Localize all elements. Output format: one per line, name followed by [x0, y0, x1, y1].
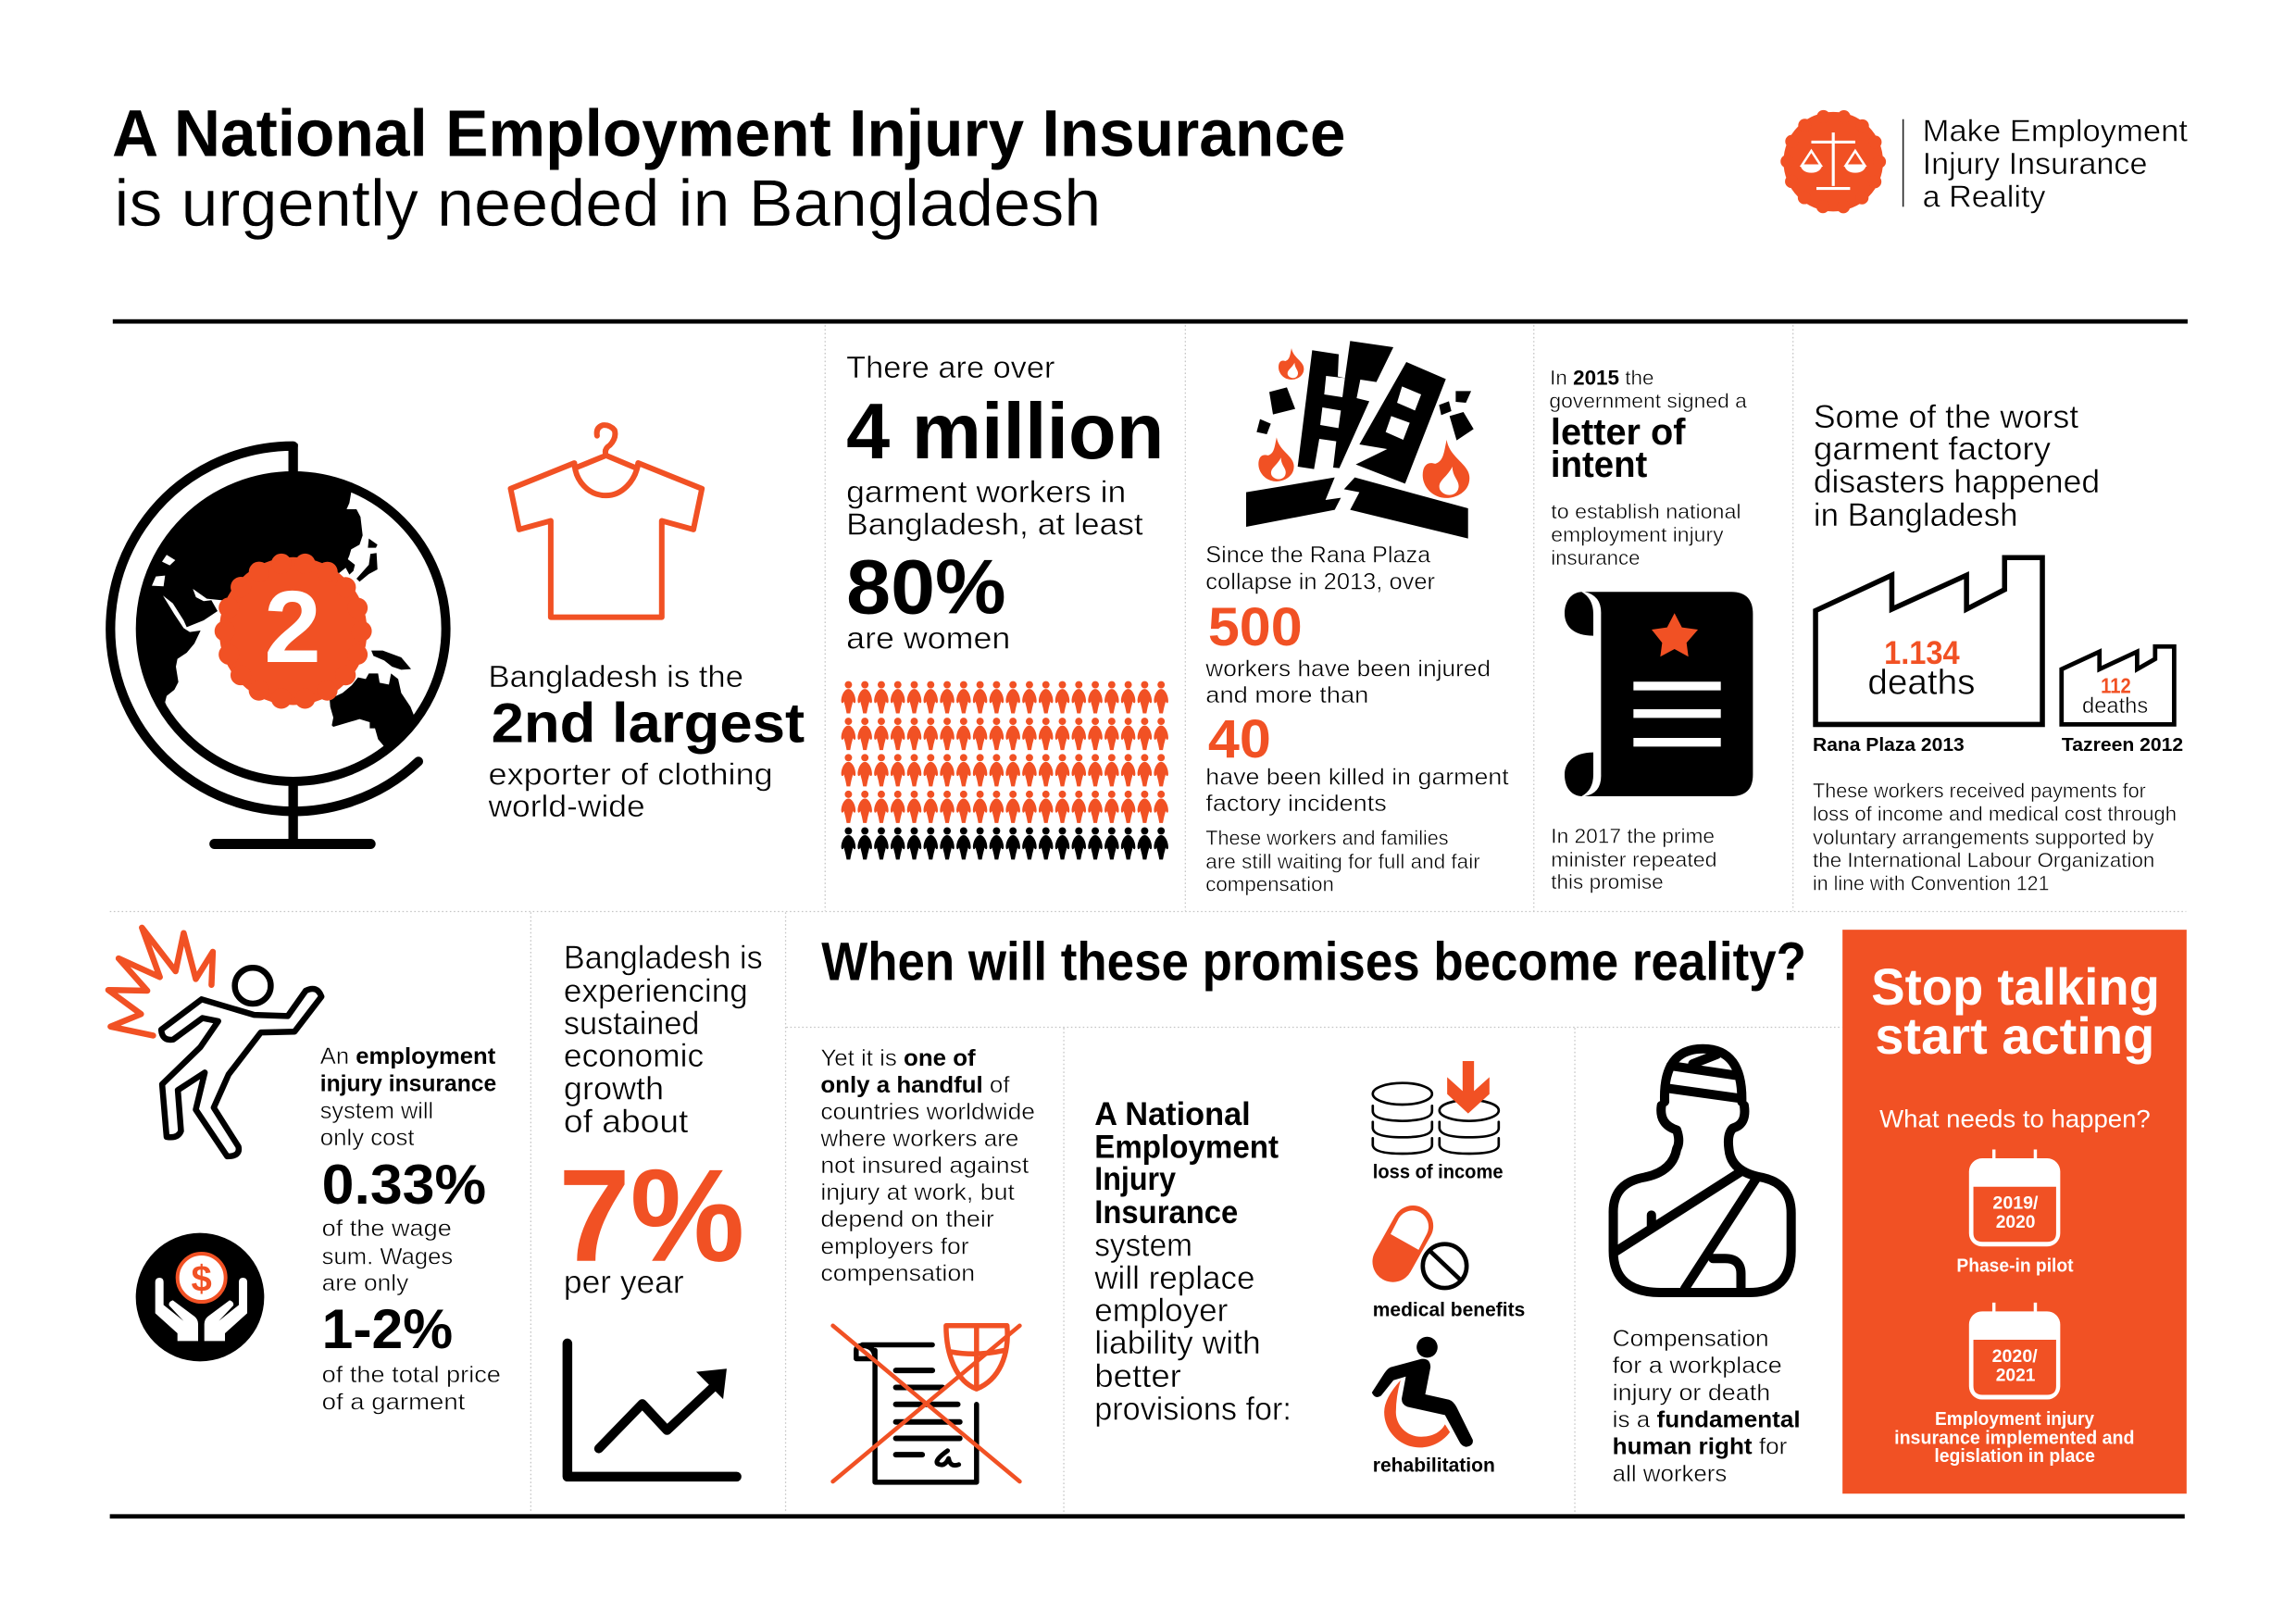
milestone: 2020/2021 implementation: 2020/	[1992, 1346, 2038, 1367]
text: system provisions: provisions for:	[1094, 1393, 1292, 1428]
milestone: 2020/2021 implementation: 2021	[1996, 1365, 2035, 1385]
text: letter of intent: to establish national	[1551, 500, 1741, 523]
text: insurance cost figures: of the total price	[322, 1363, 501, 1388]
text: insurance cost figures: of the wage	[322, 1217, 452, 1242]
icon: hands holding coin: $	[192, 1259, 212, 1300]
panel: fundamental human right	[1613, 1049, 1801, 1487]
milestone: 2019/2020 phase-in pilot	[1956, 1150, 2074, 1277]
text: system provisions: employer	[1094, 1293, 1228, 1329]
text: insurance cost figures: 1-2%	[322, 1298, 453, 1360]
text: insurance cost figures: sum. Wages	[322, 1245, 453, 1270]
text: disasters heading: Some of the worst	[1814, 400, 2078, 435]
text: worker statistics	[846, 351, 1164, 656]
text: growth statement: of about	[564, 1105, 689, 1140]
panel: 2nd largest exporter	[110, 425, 805, 843]
heading: call to action: Stop talking	[1871, 958, 2160, 1016]
milestone: 2020/2021 implementation: Employment injury	[1935, 1408, 2095, 1430]
text: what needs to happen: What needs to happen?	[1879, 1106, 2151, 1133]
text: voluntary payments: These workers received payments for	[1813, 780, 2146, 803]
text: injury and death figures: are still waiting for full and fair	[1205, 850, 1480, 873]
title: A National Employment Injury Insurance	[112, 97, 1346, 170]
logo text: Make Employment	[1923, 115, 2188, 149]
logo text	[1923, 115, 2188, 214]
text: human right statement: human right for	[1613, 1434, 1787, 1460]
icon: hands holding coin	[136, 1233, 264, 1361]
title	[112, 97, 1346, 241]
text: injury and death figures: and more than	[1205, 682, 1368, 708]
logo text: Injury Insurance	[1923, 147, 2147, 181]
text: growth statement	[558, 941, 763, 1301]
text: insurance cost figures: of a garment	[322, 1390, 466, 1415]
text: uninsured countries: Yet it is one of	[820, 1045, 976, 1071]
title: is urgently needed in Bangladesh	[114, 168, 1101, 241]
text: growth statement: Bangladesh is	[564, 941, 763, 976]
text: insurance cost figures	[320, 1044, 501, 1415]
text: growth statement: economic	[564, 1039, 704, 1074]
text: exporter statement: world-wide	[487, 790, 645, 824]
text: system provisions: liability with	[1094, 1326, 1261, 1361]
text: worker statistics: 4 million	[846, 388, 1164, 476]
text: voluntary payments: the International Labour Organization	[1813, 848, 2154, 871]
panel: handful of countries	[819, 1045, 1035, 1482]
text: uninsured countries	[819, 1045, 1035, 1286]
icon: injured man with bandage and sling	[1614, 1049, 1791, 1293]
icon: globe with rank badge: 2	[264, 570, 321, 684]
text: exporter statement: exporter of clothing	[488, 758, 773, 793]
factory: Rana Plaza	[1813, 557, 2042, 756]
text: uninsured countries: where workers are	[819, 1126, 1018, 1152]
text: voluntary payments: loss of income and medical cost through	[1813, 803, 2177, 826]
text: injury and death figures: 40	[1208, 709, 1271, 769]
text: growth statement: growth	[564, 1071, 664, 1106]
icon: globe with rank badge	[110, 443, 446, 843]
text: uninsured countries: depend on their	[820, 1206, 994, 1232]
text: letter of intent: In 2015 the	[1550, 366, 1653, 389]
text: system provisions: Insurance	[1094, 1195, 1238, 1230]
milestone: 2019/2020 phase-in pilot: Phase-in pilot	[1956, 1255, 2074, 1277]
icon: scales of justice badge	[1783, 112, 1883, 211]
panel: economic growth	[558, 941, 763, 1477]
text: human right statement: injury or death	[1613, 1380, 1770, 1405]
text: worker statistics: are women	[846, 622, 1010, 656]
text: system provisions: better	[1094, 1359, 1181, 1394]
icon: wheelchair rehabilitation	[1372, 1337, 1495, 1477]
text: insurance cost figures: An employment	[320, 1044, 495, 1069]
text: system provisions: A National	[1094, 1097, 1251, 1132]
icon: t-shirt on hanger	[511, 425, 702, 618]
text: worker statistics: There are over	[846, 351, 1054, 385]
factory: Tazreen: deaths	[2082, 694, 2148, 718]
text: insurance cost figures: 0.33%	[322, 1154, 486, 1216]
text: prime minister promise	[1551, 825, 1717, 893]
text: insurance cost figures: system will	[320, 1099, 433, 1124]
text: system provisions	[1093, 1097, 1292, 1428]
text: insurance cost figures: only cost	[320, 1126, 415, 1151]
text: system provisions: Employment	[1094, 1131, 1279, 1166]
factory: Rana Plaza: Rana Plaza 2013	[1813, 734, 1965, 756]
icon: injured worker with burst	[108, 928, 321, 1156]
panel: Rana Plaza collapse	[1204, 341, 1509, 895]
factory: Rana Plaza: deaths	[1867, 663, 1975, 702]
text: human right statement: for a workplace	[1613, 1353, 1782, 1379]
text: injury and death figures: workers have been injured	[1204, 656, 1491, 682]
text: letter of intent: intent	[1551, 444, 1647, 485]
milestone: 2019/2020 phase-in pilot: 2019/	[1992, 1193, 2039, 1214]
text: injury and death figures: 500	[1208, 597, 1303, 657]
text: voluntary payments	[1813, 780, 2177, 894]
text: worker statistics: Bangladesh, at least	[846, 507, 1143, 542]
factory: Tazreen: 112	[2101, 674, 2131, 698]
text: growth statement: per year	[564, 1266, 684, 1301]
text: human right statement: all workers	[1613, 1461, 1727, 1487]
text: injury and death figures: Since the Rana Plaza	[1205, 542, 1431, 568]
icon: collapsing burning building	[1246, 341, 1474, 539]
text: letter of intent: insurance	[1551, 546, 1640, 569]
text: voluntary payments: in line with Convention 121	[1813, 871, 2049, 894]
text: growth statement: experiencing	[564, 974, 748, 1009]
text: prime minister promise: In 2017 the prime	[1551, 825, 1715, 848]
panel: letter of intent	[1549, 366, 1753, 893]
text: disasters heading: garment factory	[1814, 432, 2052, 468]
heading: call to action	[1871, 958, 2160, 1065]
text: injury and death figures: factory incidents	[1205, 791, 1387, 817]
icon: wheelchair rehabilitation: rehabilitation	[1373, 1455, 1495, 1477]
text: worker statistics: 80%	[846, 543, 1006, 631]
text: uninsured countries: injury at work, but	[820, 1180, 1015, 1206]
text: prime minister promise: this promise	[1551, 870, 1664, 893]
panel: stop talking start acting	[1842, 930, 2187, 1493]
text: uninsured countries: only a handful of	[820, 1072, 1011, 1098]
text: prime minister promise: minister repeated	[1551, 848, 1717, 871]
text: worker statistics: garment workers in	[846, 475, 1126, 509]
logo: campaign badge and name	[1783, 112, 2188, 214]
panel: factory disasters	[1813, 400, 2183, 894]
factory: Tazreen	[2062, 646, 2183, 756]
icon: pill with no sign	[1373, 1210, 1525, 1321]
text: uninsured countries: not insured against	[820, 1153, 1029, 1179]
icon: pill with no sign: medical benefits	[1373, 1299, 1525, 1321]
text: injury and death figures: collapse in 2013, over	[1205, 568, 1435, 594]
factory: Tazreen: Tazreen 2012	[2062, 734, 2183, 756]
panel: better provisions	[1093, 1061, 1525, 1477]
logo text: a Reality	[1923, 180, 2046, 214]
panel: insurance cost	[108, 928, 501, 1415]
text: voluntary payments: voluntary arrangements supported by	[1813, 826, 2155, 849]
text: system provisions: Injury	[1094, 1162, 1177, 1197]
text: letter of intent: government signed a	[1549, 390, 1748, 413]
text: uninsured countries: employers for	[820, 1233, 969, 1259]
text: exporter statement: 2nd largest	[492, 692, 805, 754]
milestone: 2020/2021 implementation	[1894, 1303, 2135, 1467]
text: exporter statement: Bangladesh is the	[488, 660, 743, 694]
milestone: 2019/2020 phase-in pilot: 2020	[1996, 1212, 2035, 1232]
text: human right statement: is a fundamental	[1613, 1407, 1801, 1433]
heading: call to action: start acting	[1875, 1007, 2154, 1065]
text: injury and death figures: have been killed in garment	[1205, 765, 1509, 791]
text: letter of intent: employment injury	[1551, 523, 1725, 546]
milestone: 2020/2021 implementation: legislation in place	[1934, 1445, 2095, 1467]
text: uninsured countries: compensation	[820, 1260, 975, 1286]
text: insurance cost figures: injury insurance	[320, 1071, 496, 1096]
text: system provisions: system	[1094, 1229, 1192, 1264]
factory: Rana Plaza: 1.134	[1884, 636, 1960, 671]
text: growth statement: sustained	[564, 1006, 699, 1042]
text: insurance cost figures: are only	[322, 1271, 409, 1296]
text: exporter statement	[487, 660, 805, 824]
text: disasters heading	[1814, 400, 2100, 533]
text: injury and death figures: These workers and families	[1205, 827, 1449, 850]
icon: coins with down arrow	[1373, 1061, 1504, 1183]
text: injury and death figures	[1204, 542, 1509, 895]
text: injury and death figures: compensation	[1205, 872, 1334, 895]
panel: 4 million workers	[842, 351, 1168, 859]
text: letter of intent: letter of	[1551, 412, 1686, 453]
text: human right statement	[1613, 1326, 1801, 1487]
text: uninsured countries: countries worldwide	[820, 1099, 1035, 1125]
text: system provisions: will replace	[1093, 1261, 1254, 1296]
pictogram: 80% women workers	[842, 681, 1168, 859]
milestone: 2020/2021 implementation: insurance implemented and	[1894, 1427, 2135, 1448]
icon: rising line chart	[568, 1343, 737, 1477]
text: disasters heading: disasters happened	[1814, 465, 2100, 500]
heading: when will promises become reality: When will these promises become reality?	[821, 932, 1806, 993]
text: letter of intent	[1549, 366, 1748, 569]
icon: crossed-out insurance document	[833, 1326, 1019, 1482]
icon: scroll with star	[1565, 592, 1753, 796]
text: human right statement: Compensation	[1613, 1326, 1769, 1352]
icon: coins with down arrow: loss of income	[1373, 1161, 1504, 1183]
text: disasters heading: in Bangladesh	[1814, 498, 2017, 533]
text: growth statement: 7%	[558, 1143, 744, 1290]
